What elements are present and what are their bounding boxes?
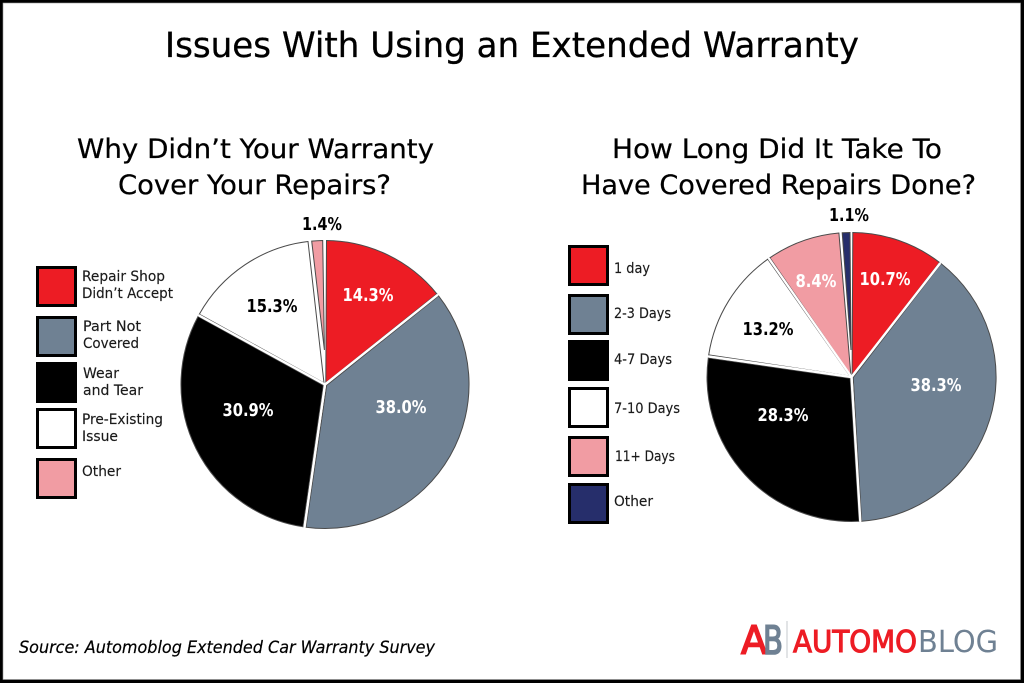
logo: Automoblog: BLOG <box>918 625 998 660</box>
panel: how long repairs took <box>570 134 996 522</box>
legend: right chart <box>570 246 680 522</box>
legend: right chart: 2-3 Days <box>614 306 671 322</box>
value labels: right chart: 10.7% <box>860 270 910 290</box>
value labels: right chart: 13.2% <box>742 320 794 340</box>
value labels: left chart: 14.3% <box>342 286 394 306</box>
legend: left chart: Covered <box>83 336 139 352</box>
logo: Automoblog: A <box>741 619 767 664</box>
value labels: right chart <box>742 206 962 426</box>
legend: left chart: Pre-Existing <box>82 412 163 428</box>
pie chart: left <box>181 240 469 528</box>
legend: left chart: Didn’t Accept <box>82 286 173 302</box>
value labels: left chart <box>222 215 426 421</box>
heading: left chart: Cover Your Repairs? <box>118 170 391 201</box>
legend: left chart: Other <box>82 464 121 480</box>
legend: right chart: 1 day <box>614 261 650 277</box>
legend: left chart: Part Not <box>83 319 141 335</box>
logo: Automoblog <box>741 619 998 664</box>
legend: right chart: Other <box>614 494 653 510</box>
legend: left chart: and Tear <box>83 383 143 399</box>
legend: right chart: 4-7 Days <box>614 352 672 368</box>
value labels: left chart: 38.0% <box>376 398 426 418</box>
pie chart: right <box>707 232 996 522</box>
title: Issues With Using an Extended Warranty <box>165 26 859 66</box>
legend: left chart: Wear <box>83 366 119 382</box>
legend: left chart <box>38 268 173 498</box>
legend: right chart: 7-10 Days <box>614 401 680 417</box>
panel: why warranty did not cover repairs <box>38 134 469 528</box>
heading: right chart: How Long Did It Take To <box>612 134 942 165</box>
heading: left chart: Why Didn’t Your Warranty <box>77 134 434 165</box>
legend: right chart: 11+ Days <box>615 449 675 465</box>
logo: Automoblog: B <box>763 619 783 664</box>
value labels: right chart: 8.4% <box>796 272 836 292</box>
value labels: left chart: 15.3% <box>246 297 298 317</box>
value labels: right chart: 28.3% <box>758 406 808 426</box>
legend: left chart: Repair Shop <box>82 269 165 285</box>
legend: left chart: Issue <box>82 429 118 445</box>
source note: Source: Automoblog Extended Car Warranty Survey <box>19 638 436 658</box>
value labels: left chart: 1.4% <box>302 215 342 235</box>
value labels: left chart: 30.9% <box>222 401 274 421</box>
heading: left chart <box>77 134 434 201</box>
heading: right chart <box>581 134 976 201</box>
value labels: right chart: 38.3% <box>910 376 962 396</box>
value labels: right chart: 1.1% <box>829 206 869 226</box>
heading: right chart: Have Covered Repairs Done? <box>581 170 976 201</box>
logo: Automoblog: AUTOMO <box>793 625 917 660</box>
